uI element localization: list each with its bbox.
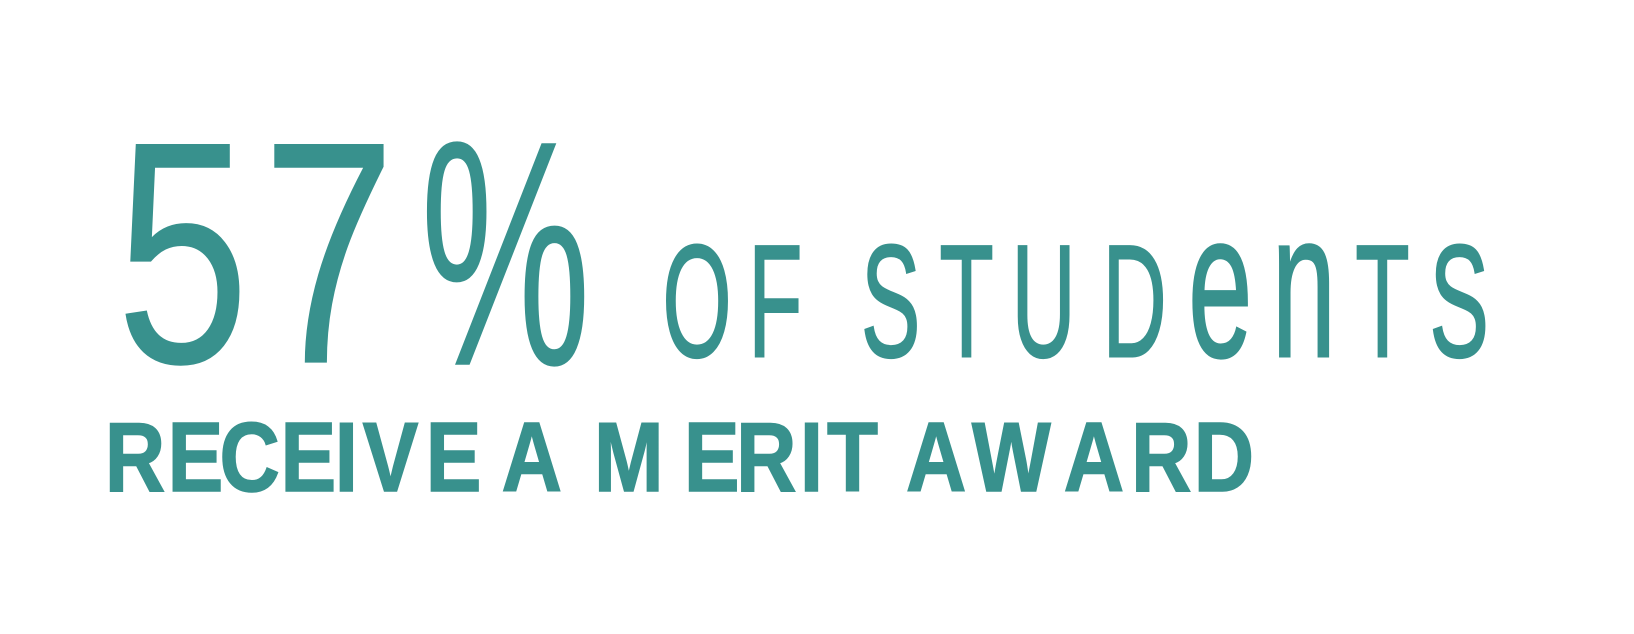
subheading: receive a merit award: RECEIVE A MERIT AWARD bbox=[105, 403, 1254, 513]
percent sign: % bbox=[420, 75, 591, 434]
heading: of students: en bbox=[1188, 168, 1336, 401]
heading: of students: TS bbox=[1355, 213, 1489, 391]
heading: of students: STUD bbox=[861, 213, 1167, 391]
statistic number: 57: 57 bbox=[116, 75, 396, 430]
heading: of students: OF bbox=[662, 213, 823, 391]
statistic and caption group bbox=[105, 75, 1489, 513]
